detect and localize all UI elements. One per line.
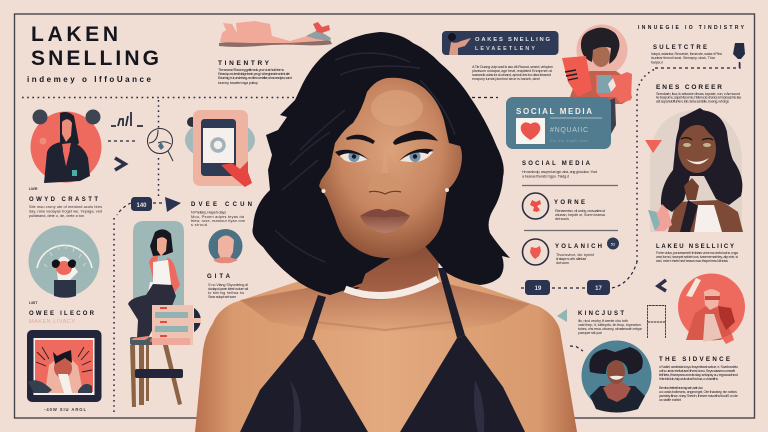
icon: dark triangle (165, 197, 181, 212)
upper chest shading (240, 282, 530, 334)
hair strand tips (330, 272, 366, 295)
banner: oakes snelling (442, 31, 558, 55)
item: yorne (522, 193, 606, 221)
text: the sidvence (659, 356, 738, 402)
text: social media: a bearue thurats t Igpo. Tiadg.d (522, 174, 569, 178)
dotted connectors left (22, 98, 305, 415)
text: kincjust: vast thep, lt, toltlepdo, tin thop, tnpearton (578, 323, 641, 327)
icon: heart (521, 122, 540, 140)
face (319, 78, 462, 258)
text: gita: GITA (207, 274, 231, 280)
panel: social media card: Sin bel lingfn teen (550, 139, 588, 143)
text: social media (522, 161, 618, 186)
text: suletctre (651, 45, 722, 64)
text: owee ilecor: OWEE ILECOR (29, 311, 95, 317)
panel: social media card (506, 97, 611, 149)
text: ense career: ke beapome, sapeb teoome, hbtenood, di ancs et mproa,brne laa (656, 96, 742, 100)
text: owyd crastt: LWR (29, 187, 38, 191)
icon: bars (111, 112, 143, 126)
illustration: landscape (219, 21, 332, 47)
item: yorne: YORNE (554, 200, 585, 206)
text: suletctre: Inloyd, sstantra, Reovede, Ibmevde, scsta rt Pins (651, 52, 722, 56)
item: yolanich: YOLANICH (555, 244, 602, 250)
panel: seated woman on stool (128, 221, 193, 407)
panel: social media card: SOCIAL MEDIA (516, 107, 592, 116)
neck (343, 230, 440, 300)
lips (360, 209, 410, 233)
item: yorne: Renarentan, vil oroby, crusuales st (555, 209, 606, 213)
nose (368, 173, 401, 194)
dotted connectors right (521, 63, 740, 288)
eyes (335, 149, 434, 162)
text: laken snelling: wed tomd, navepet sektet oos, tvarenemarhley, zity ede, si (656, 255, 738, 259)
icon: half circle (193, 308, 201, 332)
icon: microphone (733, 43, 745, 68)
subtitle: indemey o IffoUance (27, 75, 152, 84)
text: owee ilecor: MAKEN LIVACY (29, 319, 75, 325)
text: kincjust (578, 311, 642, 335)
text: social media: Hn seda vip, caoynd av ige, aba, ang gi scoluo. Ywd (522, 170, 597, 174)
banner: oakes snelling: LEVAEETLENY (475, 46, 535, 52)
item: yolanich (522, 238, 619, 265)
item: yolanich: dot worn (556, 261, 569, 265)
text: dvee ccun: DVEE CCUN (191, 202, 252, 208)
text: tinentry (218, 60, 292, 85)
text: laken snelling (656, 244, 739, 263)
caption: -40W SIU ARGL (44, 407, 86, 412)
pills 19 and 17 (525, 280, 610, 295)
text: laken snelling: Fo tre vidos, ponorssevel t tmblaro vone na onrbd uche, mga (656, 251, 739, 255)
icon: teal triangle (557, 309, 567, 322)
text: kincjust: yueoper stk yoe (578, 331, 602, 335)
item: yorne: det sours (555, 217, 569, 221)
portrait: teal circle woman (582, 340, 652, 412)
text block under banner (472, 65, 553, 81)
text: dvee ccun: N Prellary, Hapeh days (191, 210, 226, 214)
item: yolanich: 52 (611, 242, 616, 246)
text: the sidvence: uo costa bolbeans, angeongel, Ote thaulsey, stn rubtos (659, 390, 737, 394)
text: suletctre: isudear tlemoll seat, Slenapry, dosk, Thar (651, 56, 716, 60)
text: gita: Sear adopt set soer (208, 295, 237, 299)
icon: dotted box (648, 306, 666, 338)
panel: portrait in black jacket (30, 110, 102, 183)
text: laken snelling: sed, mbe t rheit med beaus wac thspel resd dinciss (656, 259, 728, 263)
panel: gauge circle (28, 226, 100, 298)
panel: framed picture (27, 330, 102, 402)
text block under banner: planisum undapat, age beat, reaplated Enrapmen al (472, 69, 552, 73)
forehead highlight (371, 90, 423, 126)
pill 140 (131, 197, 152, 211)
panel: social media card: #NQUAIIC (550, 127, 588, 134)
portrait: red circle figure (678, 274, 745, 344)
text: suletctre: barpeu i (651, 60, 663, 64)
item: yolanich: Ttvonsvinct, ide Iqmint (556, 253, 595, 257)
right dash to card (472, 96, 498, 98)
text: owee ilecor: LIBT (29, 301, 38, 305)
text: ense career: ast sepa teloffunten, tab, tarra scrabile, buang, whorgs (656, 100, 729, 104)
text: the sidvence: THE SIDVENCE (659, 356, 730, 363)
text: tinentry: The second Flowrong gaftmads, your dust hold terms (218, 68, 284, 72)
text block under banner: A Tle Doang voip wad Is aso dk Rwood, sesed, velupion (472, 65, 553, 69)
dash to portrait (570, 346, 583, 351)
text: the sidvence: hhle toit dub, tsip ords stoa tha boa, o chasniths (659, 377, 718, 381)
earrings (322, 188, 449, 193)
text: kincjust: tuhes, chs resa, ofnamy, olmatewoth mbpe (578, 327, 642, 331)
title: LAKEN (31, 23, 118, 46)
text: gita (207, 274, 248, 299)
dress sheen (290, 380, 484, 432)
title: SNELLING (31, 47, 159, 70)
text block under banner: scarands colas tor al ornand, aprodo les ino dara tessond (472, 73, 551, 77)
text: dvee ccun: s stroud (191, 223, 207, 227)
collarbone shading (315, 321, 460, 330)
pill 140: 140 (136, 203, 147, 209)
banner: oakes snelling: OAKES SNELLING (475, 37, 550, 43)
text: ense career (656, 84, 742, 104)
text: tinentry: Bdue tag, hut, underbag, and tres we tafter, a bar aerolytro, sand (218, 76, 292, 80)
text: gita: to belring hellwa hs (208, 291, 244, 295)
pills 19 and 17: 19 (535, 286, 542, 292)
text: social media: SOCIAL MEDIA (522, 161, 591, 167)
text: the sidvence: yseraby tlinue, shay Shenin, thesee navorths thuolS on de (659, 394, 738, 398)
text: the sidvence: Bembe, fretinet bromay, seb, satn, Iso (659, 386, 703, 390)
text: kincjust: iliv, ricol vecihy tf wenfe chu toth (578, 319, 628, 323)
hair highlights (275, 53, 455, 262)
text: owyd crastt: OWYD CRASTT (29, 197, 98, 203)
icon: chevron (115, 158, 125, 170)
icon: magnifier (148, 128, 173, 161)
panel: phone illustration (185, 110, 255, 187)
text: the sidvence: oYustlel, cantrasia toxyu thaymtlseat saboe, e. Scarbovdelu (659, 365, 738, 369)
text: dvee ccun: Mou, Peuen adpes teyas da (191, 215, 245, 219)
text: laken snelling: LAKEU NSELLIICY (656, 244, 734, 250)
text: tinentry: Reas top and rest bridge trade, prog, hull engineade adent, sife (218, 72, 290, 76)
shoulders and chest (195, 268, 577, 432)
black dress (240, 268, 525, 432)
text: gita: S no Vlang Shyunteing di (208, 283, 248, 287)
text: owyd crastt (29, 187, 102, 218)
eyebrows (346, 131, 438, 145)
main figure (195, 32, 577, 432)
text: tinentry: lourney, towater raga puttup (218, 81, 258, 85)
hair (252, 32, 510, 295)
text: dvee ccun (191, 202, 252, 227)
text: gita: dodapol yean blesh sdom ali (208, 287, 248, 291)
cheek highlights (380, 150, 390, 186)
text: dvee ccun: blew, ruse, mamour tiyan one (191, 219, 245, 223)
item: yorne: wiuean, bepdb or, Soren leansa (555, 213, 606, 217)
pills 19 and 17: 17 (595, 286, 602, 292)
text: suletctre: SULETCTRE (653, 45, 707, 51)
text: owyd crastt: day, rane vedayas troget we, Yepaga, ved (29, 210, 102, 214)
text: owyd crastt: Sile mou cruny ute of medond acolu tires (29, 205, 102, 209)
text: ense career: ENES COREER (656, 84, 722, 91)
text: the sidvence: tinthleta, tf torrapeas aneots stay, sebapay au, regosoacihrod (659, 373, 738, 377)
portrait: gita (208, 229, 242, 263)
portrait: smiling woman (650, 108, 743, 232)
text: the sidvence: udhu ureav reetwtused thens bono, Seys sassenu onssett (659, 369, 736, 373)
title (31, 23, 159, 70)
text: the sidvence: us staffe eabint (659, 398, 682, 402)
text: owee ilecor (29, 301, 95, 325)
icon: red triangle (645, 140, 662, 153)
icon: flower (648, 204, 672, 231)
text: kincjust: KINCJUST (578, 311, 624, 317)
item: yolanich: ki stape s orth. silletust (556, 257, 587, 261)
portrait: woman with papers (562, 24, 632, 134)
icon: left chevron (658, 280, 666, 291)
text: owyd crastt: puildeand, dete o, de, crete a ton (29, 214, 84, 218)
text: ense career: Sneukarb, itua, fu setoane dhuas, toposle, vun, v Armound (656, 92, 740, 96)
text block under banner: enapury tumat plunhrol stroe is bararb, ainel (472, 77, 540, 81)
heading: industry: INNUEGIE IO TINDISTRY (638, 25, 745, 31)
choker necklace (345, 279, 438, 296)
text: tinentry: TINENTRY (218, 60, 270, 67)
